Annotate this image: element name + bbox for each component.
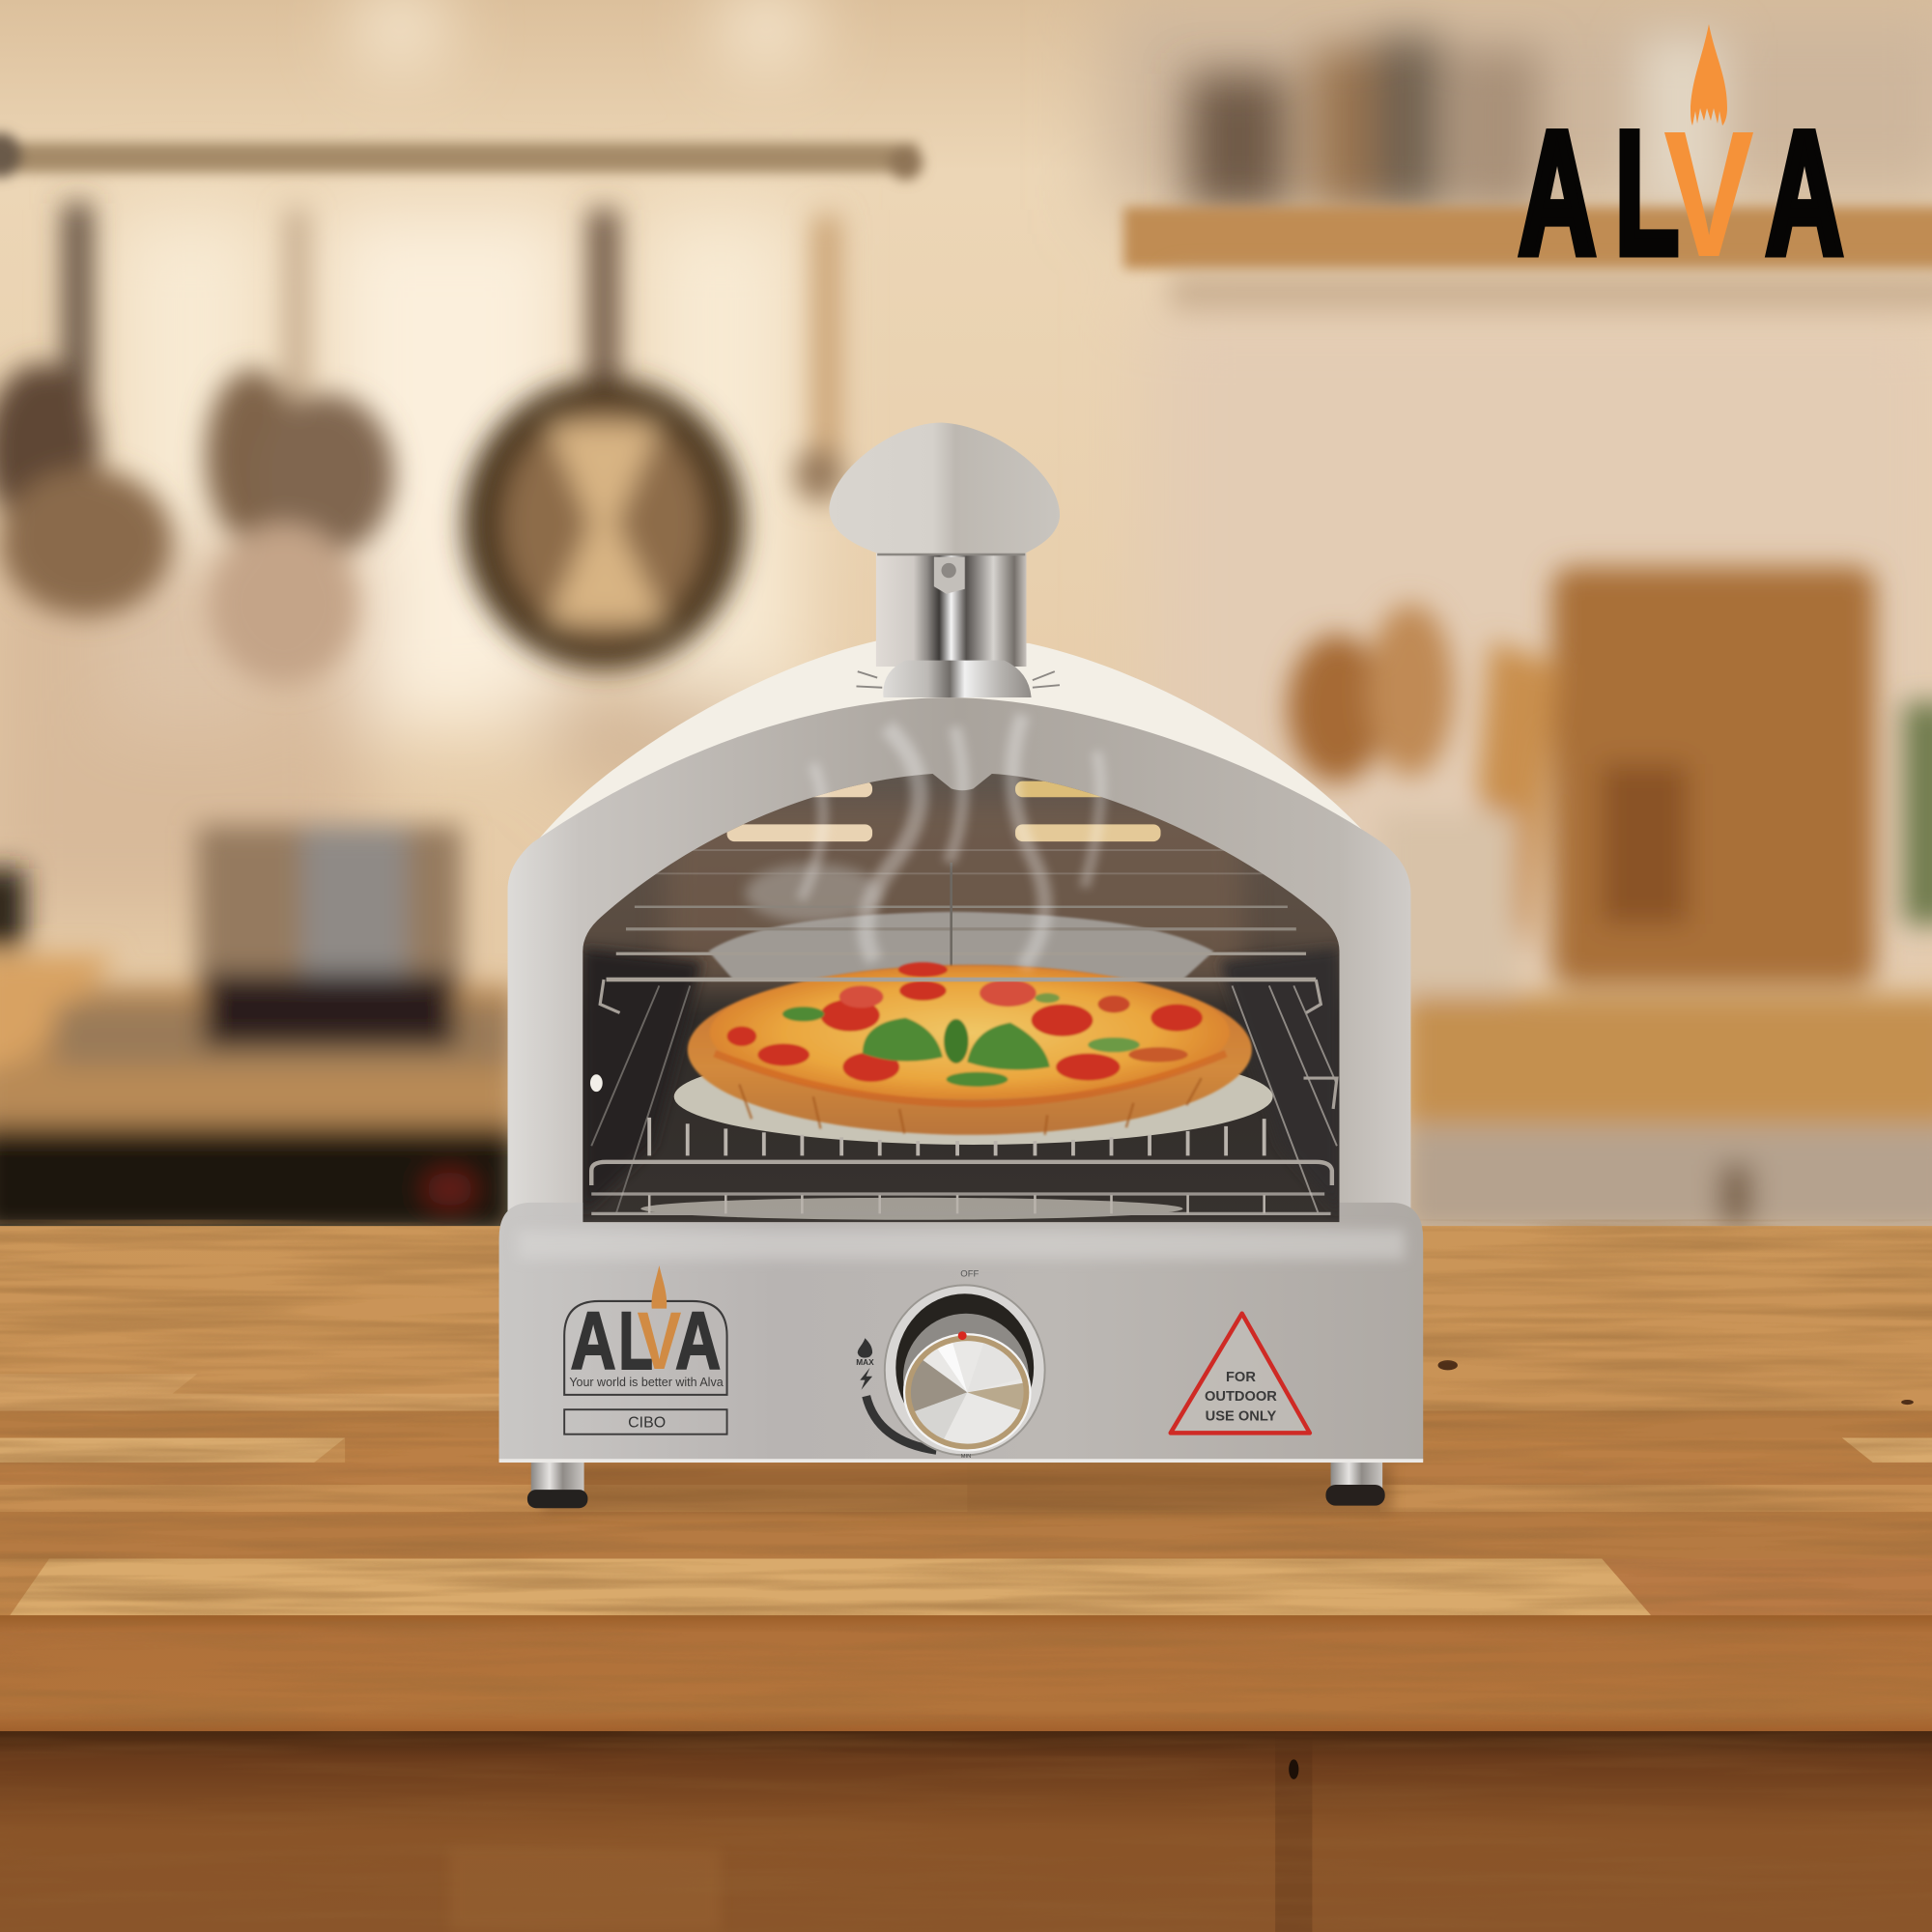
Alva logo: V (1663, 95, 1754, 295)
pizza stone (674, 1048, 1273, 1145)
small Alva badge (564, 1265, 727, 1395)
warning triangle: USE ONLY (1206, 1409, 1276, 1425)
white dome shell (511, 640, 1395, 936)
pepperoni (727, 962, 1203, 1082)
model plate: CIBO (628, 1415, 666, 1432)
blurred frying pan (464, 210, 744, 669)
Alva logo: L (1615, 96, 1679, 291)
shadow under oven (542, 1463, 1392, 1513)
vent slots (727, 781, 1161, 841)
model plate (564, 1409, 727, 1435)
pizza (688, 962, 1252, 1135)
chimney cap (829, 423, 1060, 554)
rear stone shelf (708, 912, 1213, 980)
chimney pipe (856, 551, 1060, 697)
heat scale icons (856, 1338, 936, 1450)
warning triangle (1171, 1314, 1310, 1433)
pizza oven (499, 423, 1423, 1513)
blurred kitchen background (0, 0, 1932, 1237)
Alva logo: A (1766, 96, 1843, 291)
side walls (582, 949, 702, 1213)
side rack brackets (600, 980, 1337, 1109)
control knob: OFF (960, 1268, 980, 1279)
small Alva badge: V (637, 1295, 681, 1386)
control knob: MIN (961, 1454, 971, 1460)
front wire of upper rack (607, 978, 1316, 981)
hanging rail (0, 133, 923, 180)
oven opening (582, 774, 1339, 1222)
small Alva badge: A (571, 1295, 616, 1386)
Alva logo (1519, 24, 1843, 295)
hanging utensils (0, 203, 844, 684)
small Alva badge: Your world is better with Alva (569, 1376, 724, 1389)
steam (801, 715, 1100, 967)
feet (527, 1462, 1385, 1508)
basil (782, 993, 1140, 1087)
control knob (885, 1268, 1045, 1460)
table shadowed underside (0, 1731, 1932, 1932)
oven base (499, 1203, 1423, 1463)
side slot (590, 1074, 603, 1092)
heat scale icons: MAX (856, 1357, 874, 1367)
blurred shelf with jars (1189, 37, 1725, 210)
lower wire rack (591, 1118, 1332, 1213)
warning triangle: FOR (1226, 1370, 1256, 1385)
small Alva badge: L (618, 1295, 653, 1386)
Alva logo: A (1519, 96, 1596, 291)
front arch (508, 697, 1410, 1222)
blurred cutting board and right counter (1288, 567, 1932, 1233)
table front edge (0, 1615, 1932, 1734)
blurred counter and pot (0, 826, 518, 1237)
wooden table top (0, 1226, 1932, 1620)
logo flame (1690, 24, 1727, 126)
warning triangle: OUTDOOR (1205, 1389, 1277, 1405)
upper wire rack (616, 849, 1306, 966)
small Alva badge: A (675, 1295, 721, 1386)
